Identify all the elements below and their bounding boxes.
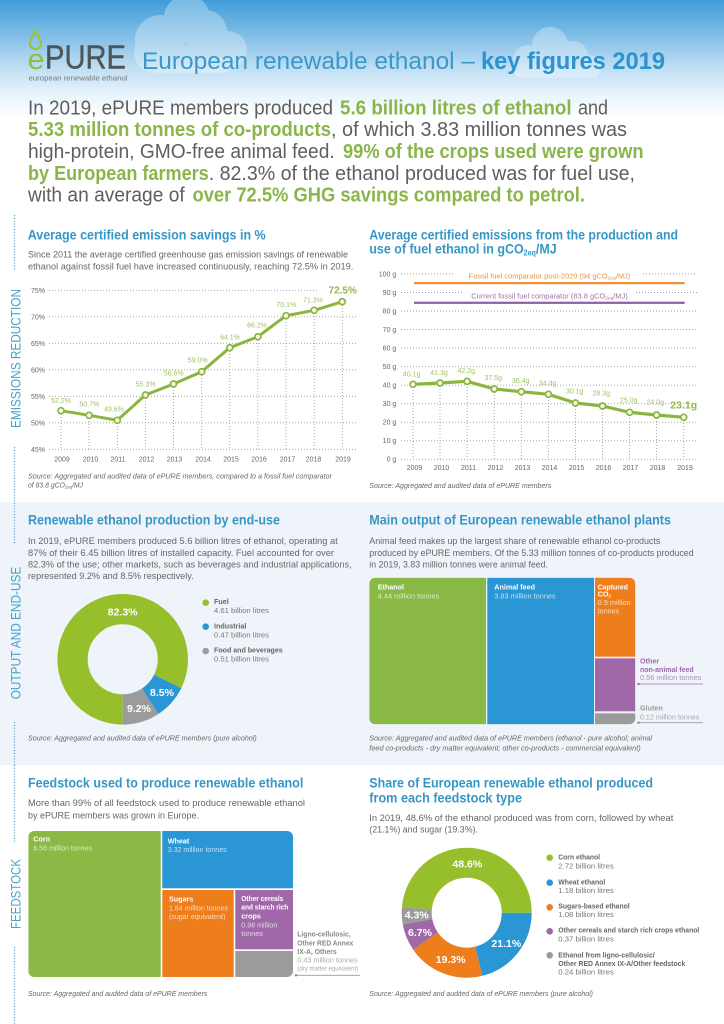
y axis labels: 70 g [383, 327, 396, 334]
x axis labels: 2018 [650, 465, 665, 472]
data labels: 30.1g [566, 389, 584, 396]
label: captured CO2: 0.9 million [598, 598, 631, 607]
label: corn: Corn [33, 835, 50, 844]
label: gluten [637, 704, 703, 724]
data labels [403, 368, 697, 411]
source note: of 83.8 gCO [28, 481, 67, 490]
legend: 0.51 billion litres [214, 654, 269, 663]
data labels: 72.5% [329, 285, 357, 296]
label: captured CO2: 2 [608, 594, 611, 599]
label: other cereals: 0.98 million [241, 920, 277, 929]
data labels: 55.3% [136, 382, 156, 389]
legend: Other cereals and starch rich crops ethanol [558, 926, 699, 935]
donut labels [405, 859, 522, 966]
heading [369, 775, 653, 805]
text block: 82.3% of the use; other markets, such as beverages and industrial applications, [28, 559, 352, 570]
comparator line: current: 2eq [605, 295, 614, 300]
legend: Wheat ethanol [558, 877, 605, 886]
label: wheat: Wheat [168, 836, 190, 845]
panel: certified emissions [369, 226, 697, 490]
y axis labels: 50% [31, 420, 45, 428]
data labels: 42.2g [458, 368, 475, 375]
intro text block [27, 98, 644, 207]
intro text block: and [578, 98, 608, 120]
data labels: 36.4g [512, 378, 530, 385]
title: European renewable ethanol – [142, 48, 476, 75]
legend: 0.47 billion litres [214, 630, 269, 639]
x axis labels: 2016 [596, 465, 611, 472]
treemap: output [369, 578, 703, 724]
label: other cereals [241, 894, 288, 938]
panel: share by feedstock type [369, 775, 699, 998]
label: animal feed [494, 582, 556, 600]
y axis labels: 65% [31, 341, 45, 348]
text block: In 2019, ePURE members produced 5.6 billion litres of ethanol, operating at [28, 536, 338, 547]
y axis labels: 90 g [383, 290, 396, 297]
data labels: 23.1g [670, 399, 697, 411]
data labels: 41.3g [430, 370, 448, 377]
label: other cereals: tonnes [241, 929, 263, 938]
comparator line: current: /MJ) [613, 293, 628, 300]
source note [369, 734, 652, 753]
intro text block: high-protein, GMO-free animal feed. [28, 141, 335, 163]
title [142, 48, 665, 75]
data labels: 40.1g [403, 371, 421, 378]
data labels: 34.4g [539, 381, 557, 388]
y axis labels: 60 g [383, 346, 396, 352]
label: ethanol [378, 582, 440, 600]
data line [413, 381, 684, 417]
legend: Ethanol from ligno-cellulosic/ [558, 950, 655, 959]
data labels: 37.5g [485, 375, 502, 382]
x axis labels: 2012 [488, 465, 503, 472]
intro text block: 99% of the crops used were grown [343, 141, 644, 163]
source note: feed co-products - dry matter equivalent; other co-products - commercial equivalent) [369, 744, 641, 753]
donut labels: 8.5% [150, 687, 175, 699]
label: other non-animal feed [637, 656, 703, 685]
label: sugars: 1.84 million tonnes [169, 903, 228, 912]
treemap: feedstock [28, 831, 360, 977]
legend: Industrial [214, 622, 246, 631]
y axis labels: 70% [31, 314, 45, 322]
text block: represented 9.2% and 8.5% respectively. [28, 571, 194, 582]
heading: Feedstock used to produce renewable ethanol [28, 775, 303, 791]
data labels [51, 285, 357, 414]
source note: Source: Aggregated and audited data of ePURE members (pure alcohol) [28, 734, 257, 743]
intro text block: . 82.3% of the ethanol produced was for fuel use, [209, 163, 635, 185]
heading: 2eq [524, 248, 536, 257]
source note: Source: Aggregated and audited data of ePURE members (pure alcohol) [369, 989, 593, 998]
y axis labels: 45% [31, 447, 45, 454]
label: gluten: Gluten [640, 704, 663, 713]
source note: Source: Aggregated and audited data of ePURE members, compared to a fossil fuel comparator [28, 471, 333, 480]
label: corn [33, 835, 92, 852]
label: sugars [169, 895, 228, 921]
data labels: 25.0g [620, 398, 638, 405]
x axis labels: 2010 [434, 465, 449, 472]
comparator line: post-2020 [414, 273, 685, 284]
legend [546, 853, 699, 977]
donut labels: 6.7% [408, 927, 433, 939]
text block: (21.1%) and sugar (19.3%). [369, 825, 478, 836]
data labels: 56.6% [164, 371, 184, 378]
label: ligno-cellulosic: Ligno-cellulosic, [297, 929, 351, 938]
donut labels: 9.2% [127, 703, 152, 715]
label: captured CO2: tonnes [598, 607, 620, 616]
data labels: 71.3% [303, 297, 323, 304]
text block: More than 99% of all feedstock used to produce renewable ethanol [28, 798, 305, 809]
heading: from each feedstock type [369, 789, 522, 805]
text block: Since 2011 the average certified greenhouse gas emission savings of renewable [28, 249, 348, 260]
data labels: 24.0g [647, 400, 664, 407]
label: captured CO2: Captured [598, 582, 628, 591]
y axis labels [379, 272, 396, 464]
page background sky [0, 0, 724, 118]
data labels: 64.1% [220, 334, 240, 341]
y axis labels: 10 g [383, 438, 396, 445]
x axis labels: 2011 [110, 456, 126, 464]
heading [369, 226, 678, 257]
label: ligno-cellulosic [295, 929, 360, 976]
heading: Main output of European renewable ethanol plants [369, 511, 671, 527]
intro text block: with an average of [27, 185, 185, 207]
text block [28, 249, 353, 272]
intro text block: 5.33 million tonnes of co-products [28, 119, 331, 141]
label: ligno-cellulosic: (dry matter equivalent) [297, 966, 358, 972]
x axis labels: 2009 [54, 456, 70, 464]
x axis labels: 2019 [335, 456, 351, 464]
y axis labels: 0 g [387, 456, 396, 464]
y axis labels: 80 g [383, 308, 396, 316]
data labels: 59.0% [188, 358, 208, 365]
label: ligno-cellulosic: IX-A, Others [297, 947, 337, 956]
y axis labels: 40 g [383, 382, 396, 390]
data line [61, 302, 342, 420]
legend: 0.24 billion litres [558, 968, 614, 977]
donut labels [108, 607, 175, 715]
logo letter e: e [28, 44, 44, 76]
heading: /MJ [536, 240, 557, 256]
y axis labels: 75% [31, 288, 45, 295]
sidebar: emissions reduction: EMISSIONS REDUCTION [9, 289, 24, 428]
label: ligno-cellulosic: Other RED Annex [297, 938, 353, 947]
x axis labels: 2011 [461, 465, 476, 472]
x axis labels: 2009 [407, 465, 422, 472]
data labels: 28.3g [593, 391, 610, 398]
donut labels: 19.3% [436, 954, 466, 966]
sidebar: feedstock: FEEDSTOCK [9, 859, 24, 929]
x axis labels: 2014 [542, 465, 557, 472]
legend: 2.72 billion litres [558, 861, 614, 870]
label: captured CO2: CO [598, 590, 608, 599]
y axis labels: 20 g [383, 420, 396, 426]
y axis labels: 55% [31, 394, 45, 401]
x axis labels [407, 465, 693, 472]
logo: ePURE [28, 30, 128, 82]
x axis labels: 2018 [306, 456, 321, 464]
y axis labels: 60% [31, 368, 45, 374]
label: other cereals: crops [241, 912, 261, 921]
heading: Renewable ethanol production by end-use [28, 511, 280, 527]
heading: Average certified emission savings in % [28, 226, 266, 242]
data labels: 66.2% [247, 323, 267, 330]
data labels: 49.6% [104, 407, 124, 414]
label: other cereals: Other cereals [241, 894, 283, 903]
donut chart: feedstock [417, 863, 517, 963]
band: output and end-use background [0, 502, 724, 765]
label: other cereals: and starch rich [241, 903, 288, 912]
label: wheat: 3.32 million tonnes [168, 845, 227, 854]
text block: by ePURE members was grown in Europe. [28, 810, 199, 821]
label: sugars: Sugars [169, 895, 193, 904]
label: sugars: (sugar equivalent) [169, 912, 225, 921]
legend: 1.08 billion litres [558, 910, 614, 919]
text block: produced by ePURE members. Of the 5.33 million tonnes of co-products produced [369, 548, 694, 559]
x axis labels: 2019 [677, 465, 693, 472]
donut labels: 21.1% [491, 938, 522, 950]
intro text block: over 72.5% GHG savings compared to petrol. [192, 185, 585, 207]
text block: ethanol against fossil fuel have increased continuously, reaching 72.5% in 2019. [28, 261, 353, 272]
x axis labels: 2012 [139, 456, 154, 464]
label: corn: 6.56 million tonnes [33, 843, 92, 852]
legend: Other RED Annex IX-A/Other feedstock [558, 959, 685, 968]
y axis labels: 100 g [379, 272, 396, 278]
intro text block: by European farmers [28, 163, 209, 185]
source note: Source: Aggregated and audited data of ePURE members [369, 481, 552, 490]
text block: Animal feed makes up the largest share of renewable ethanol co-products [369, 536, 661, 547]
text block [28, 798, 305, 821]
comparator line: post-2020: /MJ) [616, 273, 630, 280]
comparator line: current [414, 293, 685, 304]
intro text block: 5.6 billion litres of ethanol [340, 98, 572, 120]
label: ethanol: 4.44 million tonnes [378, 591, 440, 600]
text block: In 2019, 48.6% of the ethanol produced was from corn, followed by wheat [369, 813, 674, 824]
text block: in 2019, 3.83 million tonnes were animal feed. [369, 559, 548, 570]
data labels: 52.2% [51, 398, 71, 405]
panel: main output [369, 511, 703, 753]
label: other non-animal feed: Other [640, 656, 659, 665]
decorative clouds [134, 0, 601, 78]
data labels: 70.1% [276, 302, 296, 309]
x axis labels: 2015 [569, 465, 584, 472]
donut chart: end-use [73, 609, 173, 709]
text block: 87% of their 6.45 billion litres of installed capacity. Fuel accounted for over [28, 548, 334, 559]
data markers [58, 299, 345, 423]
intro text block: In 2019, ePURE members produced [28, 98, 333, 120]
legend: Corn ethanol [558, 853, 600, 862]
title: key figures 2019 [481, 48, 665, 75]
text block [28, 536, 352, 582]
text block [369, 813, 674, 836]
label: ethanol: Ethanol [378, 582, 404, 591]
legend [202, 597, 283, 663]
label: animal feed: 3.83 million tonnes [494, 591, 556, 600]
x axis labels: 2010 [83, 456, 98, 464]
donut labels: 48.6% [452, 859, 483, 871]
x axis labels: 2017 [280, 456, 295, 464]
heading: use of fuel ethanol in gCO [369, 240, 543, 256]
donut labels: 82.3% [108, 607, 138, 619]
y axis labels [31, 288, 45, 454]
x axis labels: 2015 [223, 456, 239, 464]
source note: 2eq [64, 485, 72, 490]
legend: Food and beverages [214, 646, 283, 655]
comparator line: current: Current fossil fuel comparator (83.8 gCO [471, 293, 597, 300]
data labels: 50.7% [79, 402, 99, 409]
label: ligno-cellulosic: 0.43 million tonnes [297, 955, 358, 964]
legend: Sugars-based ethanol [558, 901, 630, 910]
label: other non-animal feed: non-animal feed [640, 665, 694, 674]
panel: emission savings [28, 226, 358, 490]
label: wheat [168, 836, 227, 854]
x axis labels [54, 456, 351, 464]
y axis labels: 50 g [383, 364, 396, 371]
label: other non-animal feed: 0.56 million tonnes [640, 673, 702, 682]
x axis labels: 2016 [251, 456, 267, 464]
icon: green drop [30, 30, 41, 49]
legend: 1.18 billion litres [558, 886, 614, 895]
panel: feedstock used [28, 775, 360, 998]
logo tagline: european renewable ethanol [28, 76, 128, 82]
legend: 4.61 billion litres [214, 606, 269, 615]
x axis labels: 2014 [195, 456, 211, 464]
label: animal feed: Animal feed [494, 582, 535, 591]
legend: 0.37 billion litres [558, 934, 614, 943]
source note [28, 471, 333, 490]
comparator line: post-2020: 2eq [608, 275, 616, 280]
source note: Source: Aggregated and audited data of ePURE members (ethanol - pure alcohol; animal [369, 734, 652, 743]
y axis labels: 30 g [383, 401, 396, 408]
label: gluten: 0.12 million tonnes [640, 712, 700, 721]
line chart: emissions [379, 272, 697, 472]
legend: Fuel [214, 597, 229, 606]
x axis labels: 2013 [515, 465, 530, 472]
heading: Average certified emissions from the production and [369, 226, 678, 242]
x axis labels: 2013 [167, 456, 182, 464]
panel: production by end-use [28, 511, 352, 743]
intro text block: , of which 3.83 million tonnes was [331, 119, 627, 141]
line chart: savings [31, 285, 358, 464]
source note: /MJ [71, 481, 83, 490]
comparator line: post-2020: Fossil fuel comparator post-2020 (94 gCO [469, 273, 599, 280]
logo word PURE: PURE [45, 38, 126, 76]
heading: Share of European renewable ethanol produced [369, 775, 653, 791]
data markers [410, 378, 687, 420]
source note: Source: Aggregated and audited data of ePURE members [28, 989, 208, 998]
label: captured CO2 [598, 582, 631, 616]
text block [369, 536, 694, 570]
donut labels: 4.3% [405, 909, 429, 921]
sidebar: output and end-use: OUTPUT AND END-USE [9, 567, 24, 699]
x axis labels: 2017 [623, 465, 638, 472]
